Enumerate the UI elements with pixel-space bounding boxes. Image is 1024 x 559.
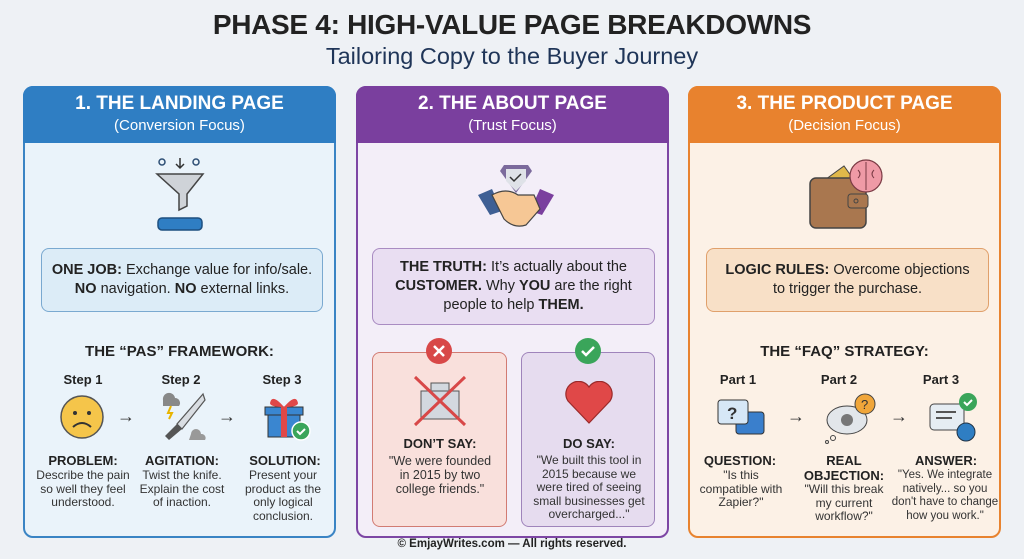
label: answer: ANSWER: <box>915 453 977 468</box>
icon: handshake <box>478 165 554 227</box>
panel: product page: Part 2 <box>821 372 857 387</box>
step labels: Step 1 <box>63 372 102 387</box>
label: agitation: AGITATION: <box>145 453 219 468</box>
header: landing: 1. THE LANDING PAGE <box>75 93 284 114</box>
arrow: → <box>890 406 908 426</box>
label: question: QUESTION: <box>704 453 776 468</box>
text: do say: DO SAY: <box>563 436 615 451</box>
label: solution: SOLUTION: <box>249 453 321 468</box>
panel: landing page: Step 2 <box>161 372 200 387</box>
heading: FAQ strategy: THE “FAQ” STRATEGY: <box>760 343 929 360</box>
heading: PAS framework: THE “PAS” FRAMEWORK: <box>85 343 274 360</box>
panel: don't say <box>372 352 507 527</box>
icon: gift <box>264 398 311 441</box>
icon: sad face <box>60 395 104 439</box>
icon: check circle <box>575 338 601 364</box>
panel: landing page <box>23 86 336 538</box>
icon: crossed building <box>414 376 466 426</box>
icon: x circle <box>426 338 452 364</box>
panel: don't say: "We were founded in 2015 by two college friends." <box>389 454 491 496</box>
icon: funnel <box>155 158 204 231</box>
header: about <box>356 86 669 143</box>
box: one job: NO navigation. NO external links. <box>75 281 289 297</box>
icon: question bubbles <box>718 400 764 434</box>
arrow: → <box>787 406 805 426</box>
panel: landing page: Twist the knife. Explain the cost of inaction. <box>140 468 224 509</box>
title: PHASE 4: HIGH-VALUE PAGE BREAKDOWNS <box>213 9 811 40</box>
footer: © EmjayWrites.com — All rights reserved. <box>398 538 626 550</box>
box: one job: ONE JOB: Exchange value for info/sale. <box>52 262 312 278</box>
panel: product page: "Will this break <box>805 482 883 496</box>
label: real objection: OBJECTION: <box>804 468 884 483</box>
box: the truth: people to help THEM. <box>443 297 584 313</box>
label: real objection: REAL <box>826 453 862 468</box>
panel: landing page: Present your product as the only logical conclusion. <box>245 468 321 522</box>
arrow: → <box>218 406 236 426</box>
panel: product page: my current <box>816 496 872 510</box>
panel: product page: "Yes. We integrate <box>898 469 992 481</box>
panel: product page: Zapier?" <box>719 495 763 509</box>
header: landing: (Conversion Focus) <box>114 117 245 134</box>
part labels: Part 1 <box>720 372 756 387</box>
box: the truth: THE TRUTH: It’s actually about the <box>400 259 627 275</box>
panel: landing page: Step 3 <box>262 372 302 387</box>
panel: about page <box>356 86 669 538</box>
label: problem: PROBLEM: <box>48 453 118 468</box>
panel: product page: Part 3 <box>923 372 959 387</box>
text: don't say: DON’T SAY: <box>404 436 476 451</box>
box: logic rules: to trigger the purchase. <box>773 281 922 297</box>
box: one job <box>41 248 323 312</box>
panel: product page <box>688 86 1001 538</box>
panel: product page: "Is this <box>723 468 759 482</box>
header: product <box>688 86 1001 143</box>
box: logic rules <box>706 248 989 312</box>
icon: question bubbles: ? <box>727 404 737 423</box>
header: product: (Decision Focus) <box>788 117 901 134</box>
header: product: 3. THE PRODUCT PAGE <box>736 93 953 114</box>
panel: product page: how you work." <box>906 510 984 522</box>
panel: product page: don't have to change <box>892 496 998 508</box>
label: real objection <box>804 453 884 483</box>
panel: product page: natively... so you <box>903 482 987 494</box>
box: the truth: CUSTOMER. Why YOU are the right <box>395 278 632 294</box>
subtitle: Tailoring Copy to the Buyer Journey <box>326 43 698 69</box>
panel: product page: workflow?" <box>815 509 873 523</box>
header: about: 2. THE ABOUT PAGE <box>418 93 607 114</box>
icon: heart <box>565 381 613 424</box>
box: logic rules: LOGIC RULES: Overcome objections <box>725 262 970 278</box>
icon: knife <box>162 392 206 440</box>
arrow: → <box>117 406 135 426</box>
panel: product page: compatible with <box>700 482 782 496</box>
icon: thought cloud: ? <box>861 397 868 412</box>
panel: do say <box>521 352 655 527</box>
icon: wallet and brain <box>809 159 883 229</box>
header: about: (Trust Focus) <box>468 117 557 134</box>
panel: landing page: Describe the pain so well they feel understood. <box>36 468 130 509</box>
header: landing <box>23 86 336 143</box>
icon: thought cloud <box>825 394 876 444</box>
box: the truth <box>372 248 655 325</box>
panel: do say: "We built this tool in 2015 because we were tired of seeing small businesses get overcharged..." <box>533 453 645 521</box>
icon: answer bubble <box>930 393 977 442</box>
